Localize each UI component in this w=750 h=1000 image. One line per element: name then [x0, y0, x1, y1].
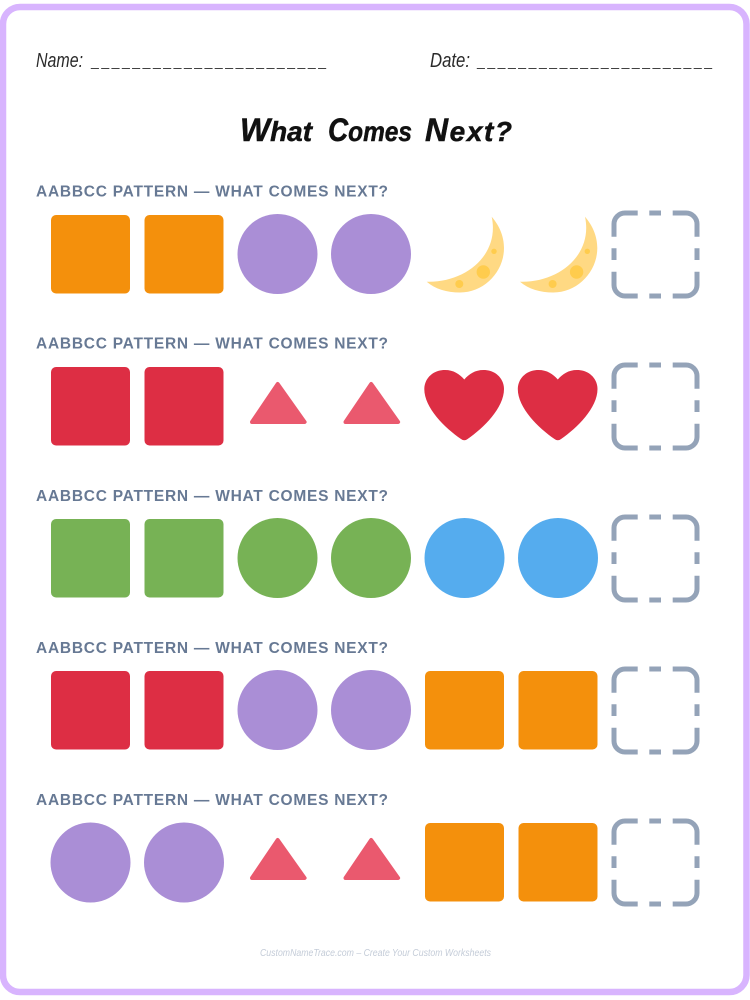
- red square 1: [51, 671, 130, 750]
- pink triangle 1: [252, 840, 305, 878]
- row 5: purple circles, triangles, orange squares: [36, 792, 697, 904]
- blue circle 1: [424, 518, 504, 598]
- empty answer box: [614, 821, 697, 904]
- name field: _______________________: [90, 53, 326, 69]
- orange square 1: [51, 215, 130, 294]
- orange square 2: [518, 823, 598, 902]
- heart 1: [424, 370, 504, 440]
- empty answer box: [614, 213, 697, 296]
- red square 2: [144, 671, 224, 750]
- purple circle 1: [50, 822, 130, 902]
- row 2: red squares, triangles, hearts: [36, 336, 697, 448]
- pink triangle 2: [346, 384, 398, 422]
- moon 2: [520, 217, 597, 292]
- name field: [36, 50, 326, 72]
- title: Next?: [425, 112, 512, 148]
- row 1 label: AABBCC PATTERN — WHAT COMES NEXT?: [36, 184, 388, 200]
- orange square 1: [425, 823, 504, 902]
- pink triangle 2: [346, 840, 398, 878]
- purple circle 1: [238, 214, 318, 294]
- green square 2: [144, 519, 224, 598]
- date field: Date:: [430, 50, 470, 72]
- name field: Name:: [36, 50, 83, 72]
- empty answer box: [614, 517, 697, 600]
- green square 1: [51, 519, 130, 598]
- date field: _______________________: [476, 53, 712, 69]
- moon 1: [427, 217, 504, 292]
- purple circle 1: [238, 670, 318, 750]
- orange square 2: [144, 215, 224, 294]
- red square 2: [144, 367, 224, 446]
- footer: CustomNameTrace.com – Create Your Custom Worksheets: [260, 948, 491, 959]
- row 4: red squares, purple circles, orange squares: [36, 640, 697, 752]
- purple circle 2: [331, 670, 411, 750]
- date field: [430, 50, 712, 72]
- purple circle 2: [144, 822, 224, 902]
- title: Comes: [328, 112, 412, 148]
- row 3 label: AABBCC PATTERN — WHAT COMES NEXT?: [36, 488, 388, 505]
- blue circle 2: [518, 518, 598, 598]
- title: What: [240, 112, 314, 148]
- empty answer box: [614, 669, 697, 752]
- green circle 1: [238, 518, 318, 598]
- row 3: green squares, green circles, blue circles: [36, 488, 697, 600]
- green circle 2: [331, 518, 411, 598]
- orange square 1: [425, 671, 504, 750]
- row 5 label: AABBCC PATTERN — WHAT COMES NEXT?: [36, 792, 388, 809]
- pink triangle 1: [252, 384, 305, 422]
- purple circle 2: [331, 214, 411, 294]
- empty answer box: [614, 365, 697, 448]
- orange square 2: [518, 671, 598, 750]
- row 4 label: AABBCC PATTERN — WHAT COMES NEXT?: [36, 640, 388, 657]
- heart 2: [518, 370, 598, 440]
- title: [240, 112, 512, 148]
- row 1: orange squares, purple circles, moons: [36, 184, 697, 296]
- red square 1: [51, 367, 130, 446]
- row 2 label: AABBCC PATTERN — WHAT COMES NEXT?: [36, 336, 388, 352]
